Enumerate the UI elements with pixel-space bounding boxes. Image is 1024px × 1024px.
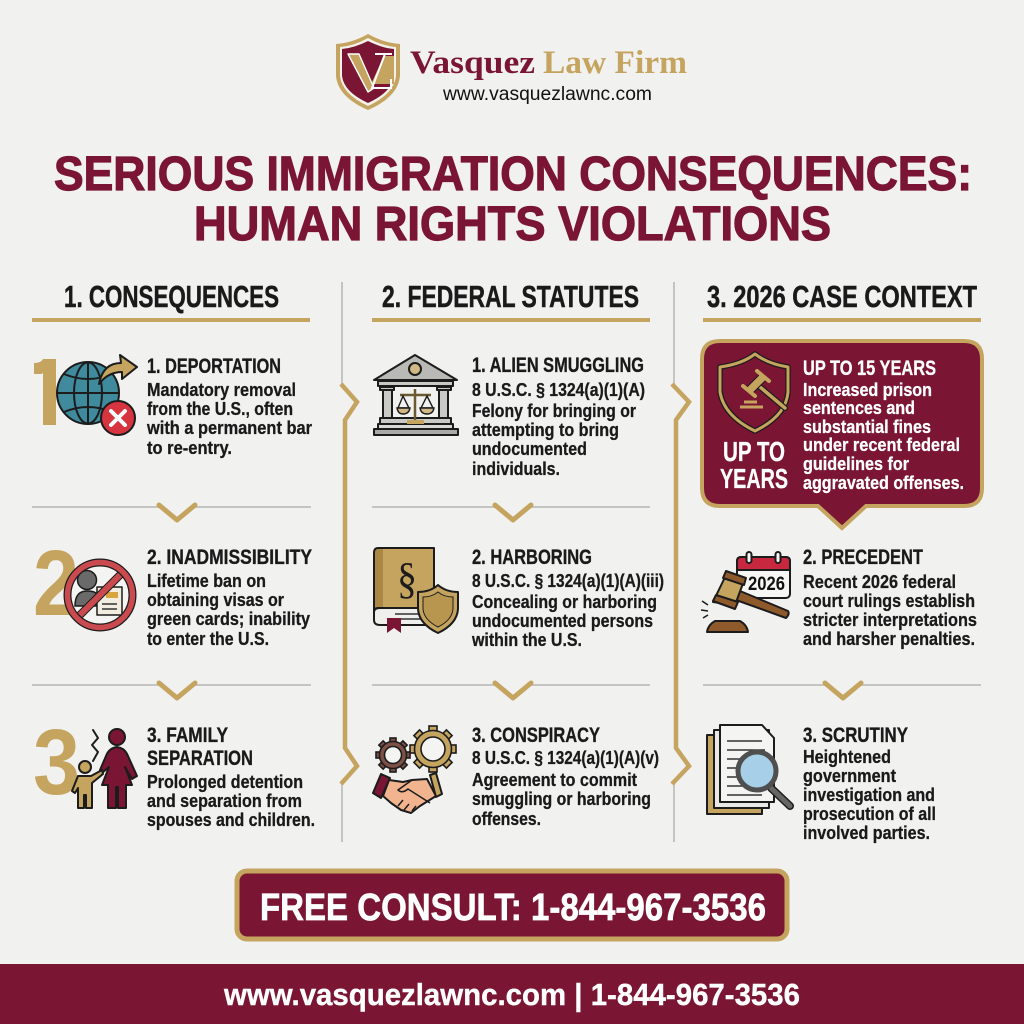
item: harboring	[471, 545, 664, 650]
icon: gears and handshake	[373, 726, 456, 813]
icon: logo shield	[336, 34, 400, 110]
item: conspiracy: 8 U.S.C. § 1324(a)(1)(A)(v)	[472, 747, 659, 768]
item: precedent: stricter interpretations	[803, 609, 977, 630]
column separators with gold connectors	[341, 282, 689, 842]
item: alien smuggling: Felony for bringing or	[472, 400, 636, 421]
item: conspiracy: offenses.	[472, 808, 541, 829]
item: alien smuggling: undocumented	[472, 438, 587, 459]
panel: federal statutes	[372, 280, 664, 829]
footer bar: www.vasquezlawnc.com | 1-844-967-3536	[223, 977, 800, 1012]
item: precedent: court rulings establish	[803, 590, 975, 611]
icon: banned visa	[65, 560, 135, 630]
item: alien smuggling: individuals.	[472, 458, 560, 479]
call to action button	[237, 871, 787, 939]
item: family separation: Prolonged detention	[147, 771, 303, 792]
divider chevron	[32, 683, 311, 698]
item: harboring: undocumented persons	[472, 610, 653, 631]
divider chevron	[703, 683, 981, 698]
item: deportation	[146, 354, 312, 458]
callout text: under recent federal	[803, 434, 960, 455]
item: scrutiny	[803, 723, 936, 843]
panel: 2026 case context	[701, 280, 982, 843]
item: family separation	[147, 723, 315, 830]
item: alien smuggling: attempting to bring	[472, 419, 619, 440]
footer bar	[0, 964, 1024, 1024]
item: conspiracy: smuggling or harboring	[472, 788, 651, 809]
callout: up to 15 years	[702, 341, 982, 528]
item: deportation: to re-entry.	[147, 437, 232, 458]
item: inadmissibility: to enter the U.S.	[147, 628, 269, 649]
callout text: aggravated offenses.	[803, 472, 964, 493]
item: deportation: with a permanent bar	[146, 417, 312, 438]
item: inadmissibility: 2. INADMISSIBILITY	[147, 545, 312, 569]
item: conspiracy	[472, 723, 659, 829]
item: alien smuggling: 1. ALIEN SMUGGLING	[472, 353, 644, 377]
item: inadmissibility	[147, 545, 312, 649]
callout badge label: YEARS	[720, 463, 788, 494]
icon: calendar and gavel: 2026	[748, 574, 785, 595]
item: harboring: Concealing or harboring	[472, 591, 657, 612]
item: conspiracy: 3. CONSPIRACY	[472, 723, 600, 747]
heading: federal statutes	[372, 280, 650, 322]
item: inadmissibility: green cards; inability	[147, 608, 311, 629]
callout badge label	[720, 436, 788, 494]
big numeral 1: 1	[23, 341, 75, 445]
title: HUMAN RIGHTS VIOLATIONS	[194, 197, 831, 251]
item: harboring: within the U.S.	[471, 629, 582, 650]
heading: federal statutes: 2. FEDERAL STATUTES	[382, 280, 639, 314]
item: deportation: Mandatory removal	[147, 379, 296, 400]
item: family separation: 3. FAMILY	[147, 723, 228, 747]
icon: courthouse with scales	[374, 355, 458, 435]
firm name accent: Law Firm	[543, 45, 687, 81]
item: conspiracy: Agreement to commit	[472, 769, 637, 790]
item: deportation: from the U.S., often	[147, 398, 293, 419]
item: family separation: and separation from	[147, 790, 302, 811]
firm name: Vasquez	[410, 45, 535, 81]
icon: documents with magnifier	[707, 725, 790, 814]
item: alien smuggling	[472, 353, 645, 479]
icon: family separation	[72, 729, 137, 808]
big numeral 1	[34, 359, 56, 425]
icon: law book with shield	[374, 548, 458, 633]
divider chevron	[32, 505, 311, 520]
call to action button: FREE CONSULT: 1-844-967-3536	[260, 887, 766, 929]
item: inadmissibility: Lifetime ban on	[147, 570, 266, 591]
heading: consequences: 1. CONSEQUENCES	[64, 280, 279, 314]
item: family separation: SEPARATION	[147, 746, 253, 770]
callout text: sentences and	[803, 397, 915, 418]
item: scrutiny: government	[803, 765, 896, 786]
item: alien smuggling: 8 U.S.C. § 1324(a)(1)(A)	[472, 379, 645, 400]
item: deportation: 1. DEPORTATION	[147, 354, 281, 378]
callout text: substantial fines	[803, 416, 931, 437]
icon: globe with arrow and cross	[57, 355, 137, 435]
icon: law book with shield: §	[397, 554, 417, 603]
icon: shield with gavel	[720, 354, 788, 431]
heading: consequences	[32, 280, 310, 322]
callout text: guidelines for	[803, 453, 909, 474]
item: scrutiny: Heightened	[803, 746, 891, 767]
item: inadmissibility: obtaining visas or	[147, 589, 284, 610]
icon: calendar and gavel	[701, 552, 790, 632]
callout text: Increased prison	[803, 379, 932, 400]
item: scrutiny: investigation and	[803, 784, 935, 805]
item: harboring: 8 U.S.C. § 1324(a)(1)(A)(iii)	[472, 570, 664, 591]
item: scrutiny: prosecution of all	[803, 803, 936, 824]
divider chevron	[372, 683, 650, 698]
callout text	[803, 356, 964, 493]
item: precedent: 2. PRECEDENT	[803, 545, 923, 569]
callout text: UP TO 15 YEARS	[803, 356, 936, 380]
title	[54, 147, 972, 251]
item: precedent	[803, 545, 977, 649]
item: harboring: 2. HARBORING	[472, 545, 592, 569]
item: scrutiny: involved parties.	[803, 822, 930, 843]
big numeral 2: 2	[33, 531, 79, 635]
divider chevron	[372, 505, 650, 520]
item: precedent: and harsher penalties.	[803, 628, 975, 649]
logo and firm name	[336, 34, 687, 110]
big numeral 3: 3	[33, 710, 80, 814]
website: www.vasquezlawnc.com	[442, 84, 652, 105]
callout badge label: UP TO	[723, 436, 785, 467]
panel: consequences	[23, 280, 315, 830]
item: family separation: spouses and children.	[147, 809, 315, 830]
item: scrutiny: 3. SCRUTINY	[803, 723, 908, 747]
item: precedent: Recent 2026 federal	[803, 571, 956, 592]
